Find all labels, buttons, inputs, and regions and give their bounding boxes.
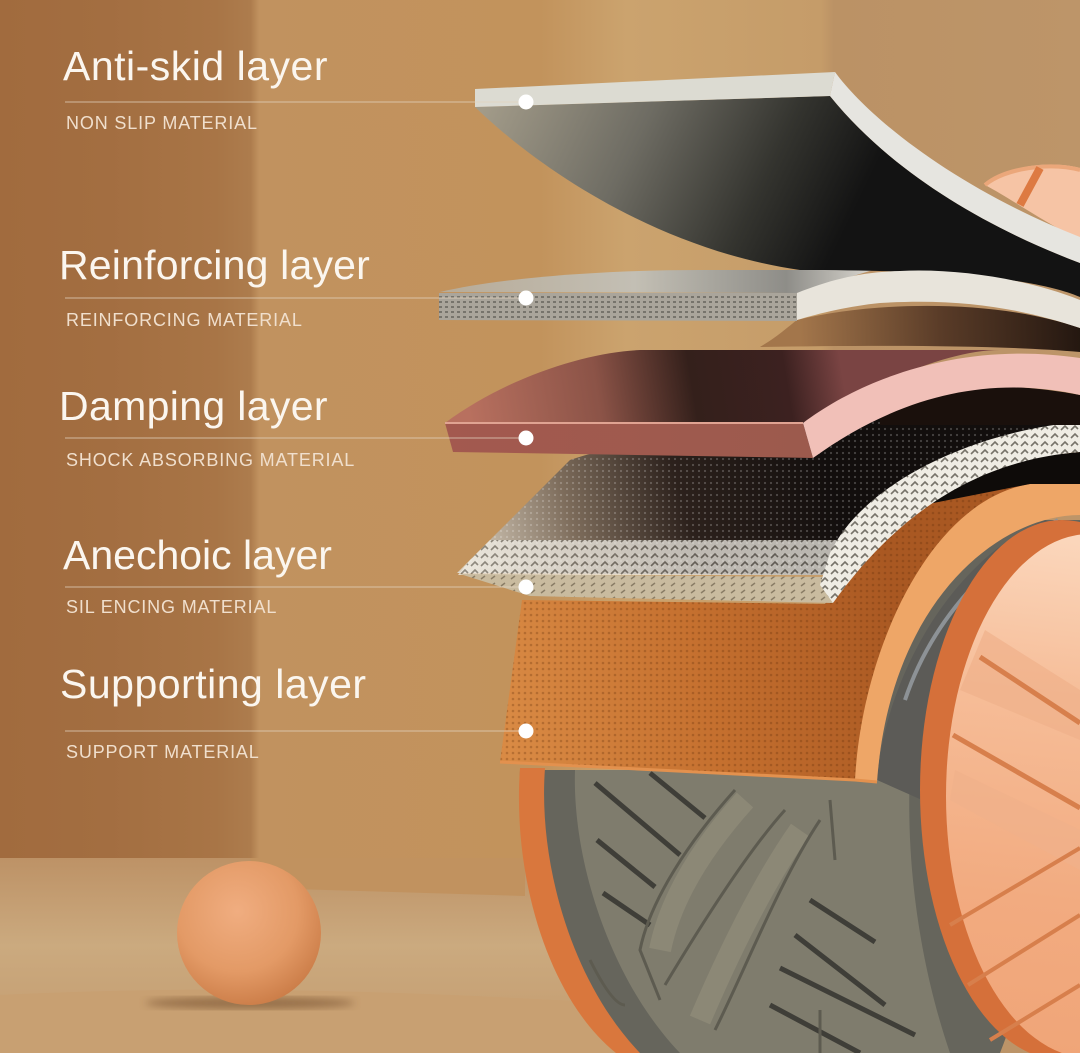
ab wheel: [519, 520, 1080, 1053]
layer: reinforcing band: [797, 271, 1080, 328]
marker dots: [518, 94, 534, 738]
heading: anechoic layer: Anechoic layer: [63, 532, 332, 578]
floor: [0, 858, 640, 1053]
floor shadow: [145, 997, 355, 1009]
heading: anti-skid layer: Anti-skid layer: [63, 43, 328, 89]
layer: reinforcing: [439, 270, 1080, 352]
heading: damping layer: Damping layer: [59, 383, 328, 429]
heading: supporting layer: Supporting layer: [60, 661, 367, 707]
sublabel: non slip material: NON SLIP MATERIAL: [66, 113, 258, 133]
sublabel: reinforcing material: REINFORCING MATERIAL: [66, 310, 303, 330]
heading: reinforcing layer: Reinforcing layer: [59, 242, 370, 288]
layer: anti-skid: [475, 72, 1080, 297]
tread: [519, 520, 1080, 1053]
layer: anechoic: [457, 400, 1080, 603]
sublabel: support material: SUPPORT MATERIAL: [66, 742, 260, 762]
icon: orange ball: [177, 861, 321, 1005]
second wheel hub, top right: [985, 165, 1080, 240]
hub: [920, 520, 1080, 1053]
sublabel: silencing material: SIL ENCING MATERIAL: [66, 597, 277, 617]
sublabel: shock absorbing material: SHOCK ABSORBING MATERIAL: [66, 450, 355, 470]
grey ring: [877, 520, 1062, 800]
layer: supporting: [500, 484, 1080, 782]
layer: damping: [445, 350, 1080, 458]
leader lines: [65, 102, 526, 731]
